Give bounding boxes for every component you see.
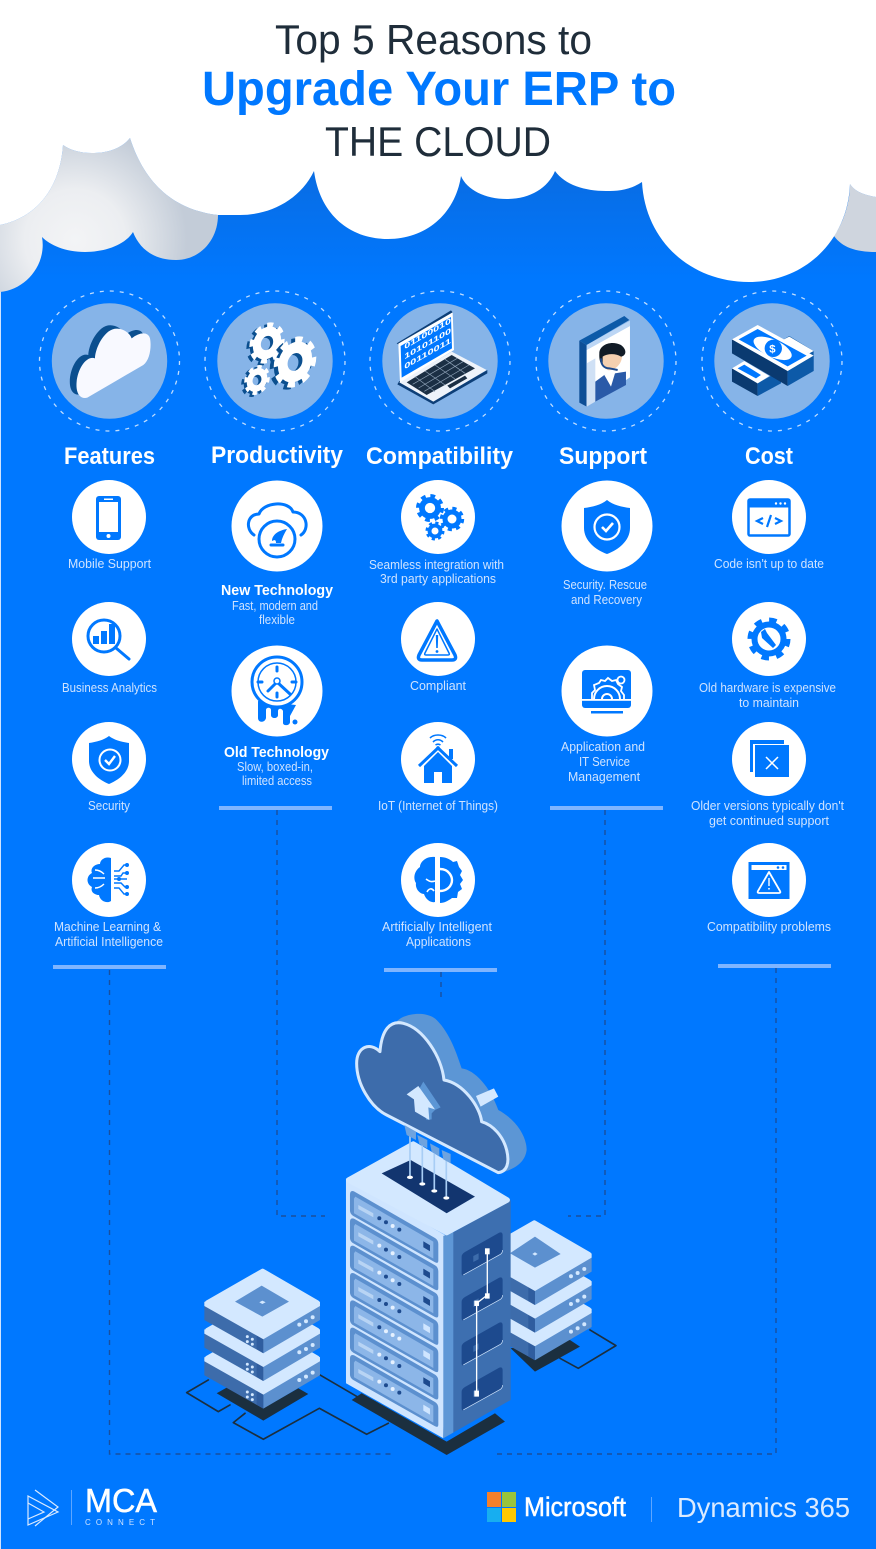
icon: isometric laptop: 00110011	[404, 336, 452, 371]
item: old hardware	[699, 602, 836, 710]
logo: mca connect: MCA	[85, 1482, 157, 1519]
column: productivity	[205, 291, 345, 810]
heading: features: Features	[64, 443, 155, 470]
item: compliant: Compliant	[410, 679, 467, 693]
title: Top 5 Reasons to	[275, 16, 592, 63]
item: new technology: flexible	[259, 613, 295, 627]
icon: support agent	[536, 291, 676, 431]
logo: mca connect	[28, 1482, 157, 1527]
illustration: servers and cloud	[187, 1014, 616, 1455]
item: iot	[378, 722, 498, 813]
icon: isometric laptop: 01100010	[404, 316, 452, 351]
item: code out of date	[714, 480, 824, 571]
server stack: left	[204, 1271, 320, 1421]
connector lines	[110, 810, 776, 1454]
back cloud: left	[0, 138, 218, 292]
item: code out of date: Code isn't up to date	[714, 557, 824, 571]
item: old technology: Old Technology	[224, 744, 330, 761]
heading: compatibility: Compatibility	[366, 443, 514, 470]
item: new technology: New Technology	[221, 582, 334, 599]
heading: cost: Cost	[745, 443, 793, 470]
cloud with upload arrow	[357, 1014, 527, 1200]
item: old hardware: Old hardware is expensive	[699, 681, 836, 695]
item: compliant	[401, 602, 475, 693]
icon: money stacks: $	[769, 344, 776, 356]
item: security rescue and recovery	[562, 480, 652, 607]
item: old technology	[224, 646, 330, 788]
heading: productivity: Productivity	[211, 442, 344, 469]
cables	[187, 1330, 616, 1439]
title: THE CLOUD	[325, 118, 551, 165]
title: Upgrade Your ERP to	[202, 63, 676, 116]
item: older versions: get continued support	[709, 814, 830, 828]
item: artificially intelligent: Applications	[406, 935, 471, 949]
heading: support: Support	[559, 443, 647, 470]
title	[202, 16, 676, 165]
item: new technology	[221, 480, 334, 627]
item: security	[72, 722, 146, 813]
item: compatibility problems	[707, 843, 831, 934]
item: application and it service management: IT Service	[579, 755, 630, 769]
item: business analytics	[62, 602, 157, 695]
logo: microsoft: Microsoft	[524, 1492, 626, 1522]
column: compatibility	[366, 291, 514, 972]
logo: microsoft	[487, 1492, 626, 1522]
item: mobile support	[68, 480, 152, 571]
item: seamless integration	[369, 480, 504, 586]
item: application and it service management: Management	[568, 770, 641, 784]
item: machine learning: Artificial Intelligence	[55, 935, 163, 949]
item: business analytics: Business Analytics	[62, 681, 157, 695]
item: old hardware: to maintain	[739, 696, 799, 710]
item: old technology: limited access	[242, 774, 312, 788]
item: security rescue and recovery: Security. Rescue	[563, 578, 647, 592]
icon: isometric laptop: 10101100	[404, 326, 452, 361]
front white cloud	[0, 0, 876, 282]
item: artificially intelligent	[382, 843, 493, 949]
item: old technology: Slow, boxed-in,	[237, 760, 313, 774]
item: machine learning	[54, 843, 163, 949]
icon: isometric cloud	[40, 291, 180, 431]
item: artificially intelligent: Artificially Intelligent	[382, 920, 493, 934]
server stack: right	[476, 1223, 592, 1372]
logo: dynamics 365: Dynamics 365	[677, 1492, 850, 1523]
item: mobile support: Mobile Support	[68, 557, 152, 571]
icon: isometric laptop	[370, 291, 510, 431]
icon: money stacks	[702, 291, 842, 431]
item: application and it service management: Application and	[561, 740, 645, 754]
item: compatibility problems: Compatibility problems	[707, 920, 831, 934]
main server tower	[346, 1144, 511, 1455]
logo: mca connect: CONNECT	[85, 1518, 155, 1527]
icon: isometric gears	[205, 291, 345, 431]
item: security rescue and recovery: and Recovery	[571, 593, 643, 607]
item: seamless integration: 3rd party applications	[380, 572, 496, 586]
item: application and it service management	[561, 646, 652, 784]
item: older versions	[691, 722, 844, 828]
item: older versions: Older versions typically don't	[691, 799, 844, 813]
item: machine learning: Machine Learning &	[54, 920, 162, 934]
back cloud: right	[834, 184, 876, 252]
column: support	[536, 291, 676, 810]
column: features	[40, 291, 180, 969]
item: seamless integration: Seamless integration with	[369, 558, 504, 572]
item: new technology: Fast, modern and	[232, 599, 318, 613]
item: security: Security	[88, 799, 131, 813]
item: iot: IoT (Internet of Things)	[378, 799, 498, 813]
column: cost	[691, 291, 844, 968]
